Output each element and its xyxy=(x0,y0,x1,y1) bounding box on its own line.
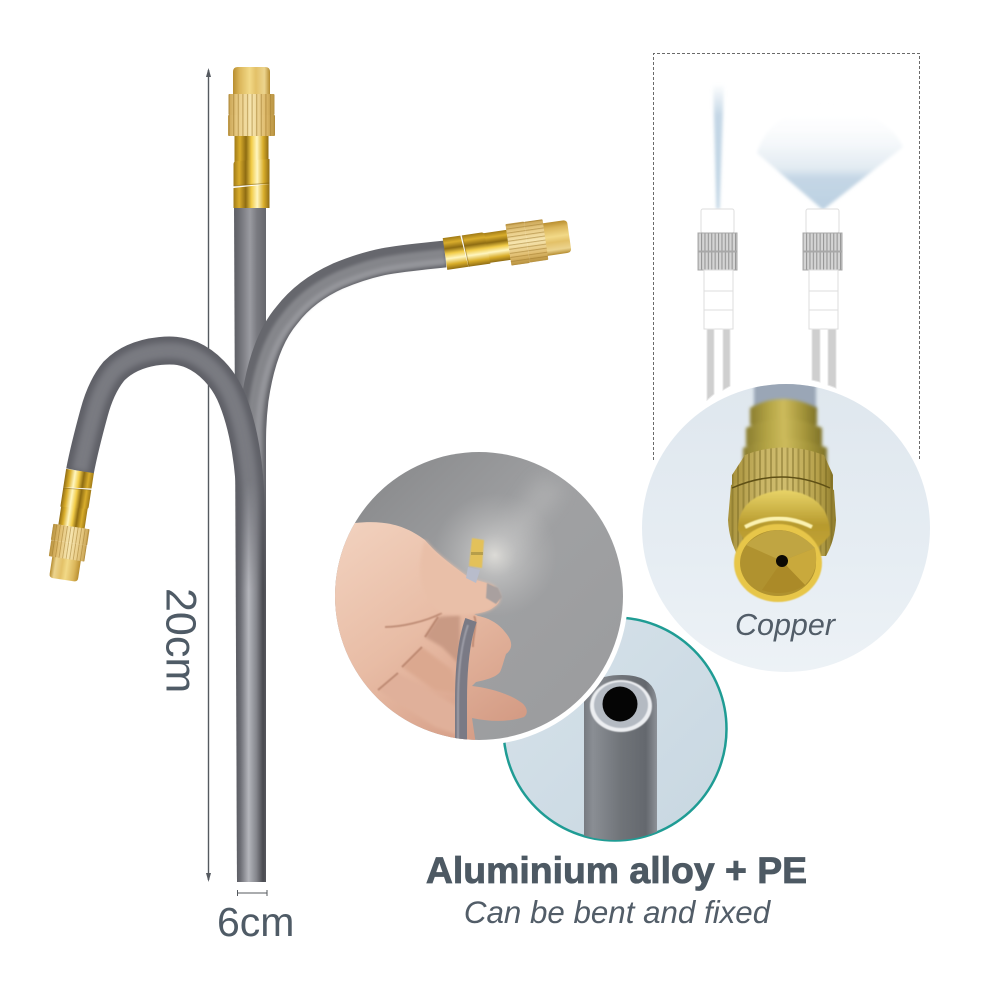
knurled collar xyxy=(728,448,836,556)
hand xyxy=(330,522,527,745)
thumb over tube xyxy=(420,540,500,615)
right brass nozzle xyxy=(442,215,572,275)
lower tube segment xyxy=(236,480,266,882)
width dimension line xyxy=(238,890,267,896)
nozzle outline: cone xyxy=(803,209,842,388)
tube cross-section xyxy=(584,675,657,850)
small nozzle xyxy=(466,538,484,583)
nozzle hole xyxy=(776,555,788,567)
brass neck xyxy=(743,399,827,468)
height dimension arrow xyxy=(206,68,211,882)
panel: aluminium cross-section circle xyxy=(504,618,726,850)
panel: hand photo circle xyxy=(330,447,628,745)
top brass nozzle xyxy=(228,67,275,208)
collar shoulder xyxy=(738,490,830,547)
jet spray beam xyxy=(713,84,724,209)
label: 20cm: 20cm xyxy=(156,588,204,693)
mist xyxy=(448,485,553,600)
product: bendable tubes with brass nozzles xyxy=(45,67,572,882)
held tube xyxy=(461,620,471,745)
tube stub xyxy=(752,384,818,409)
fingers behind tube xyxy=(404,615,461,734)
right bent tube xyxy=(252,254,445,520)
main vertical tube xyxy=(234,205,266,882)
panel: copper nozzle circle xyxy=(639,380,933,675)
subheading: Can be bent and fixed: Can be bent and fixed xyxy=(464,895,772,930)
spray diagram xyxy=(698,84,903,400)
label: Copper: Copper xyxy=(735,608,837,642)
label: 6cm: 6cm xyxy=(217,899,294,945)
cone spray mist xyxy=(757,105,903,210)
dashed spray comparison frame xyxy=(654,54,920,460)
nozzle outline: jet xyxy=(698,209,737,400)
left looping tube xyxy=(80,350,251,620)
heading: Aluminium alloy + PE: Aluminium alloy + PE xyxy=(426,849,807,891)
finger creases xyxy=(378,613,475,690)
nozzle tip xyxy=(734,524,822,602)
left brass nozzle xyxy=(45,468,98,582)
backdrop xyxy=(335,452,623,740)
teal circle xyxy=(504,618,726,840)
